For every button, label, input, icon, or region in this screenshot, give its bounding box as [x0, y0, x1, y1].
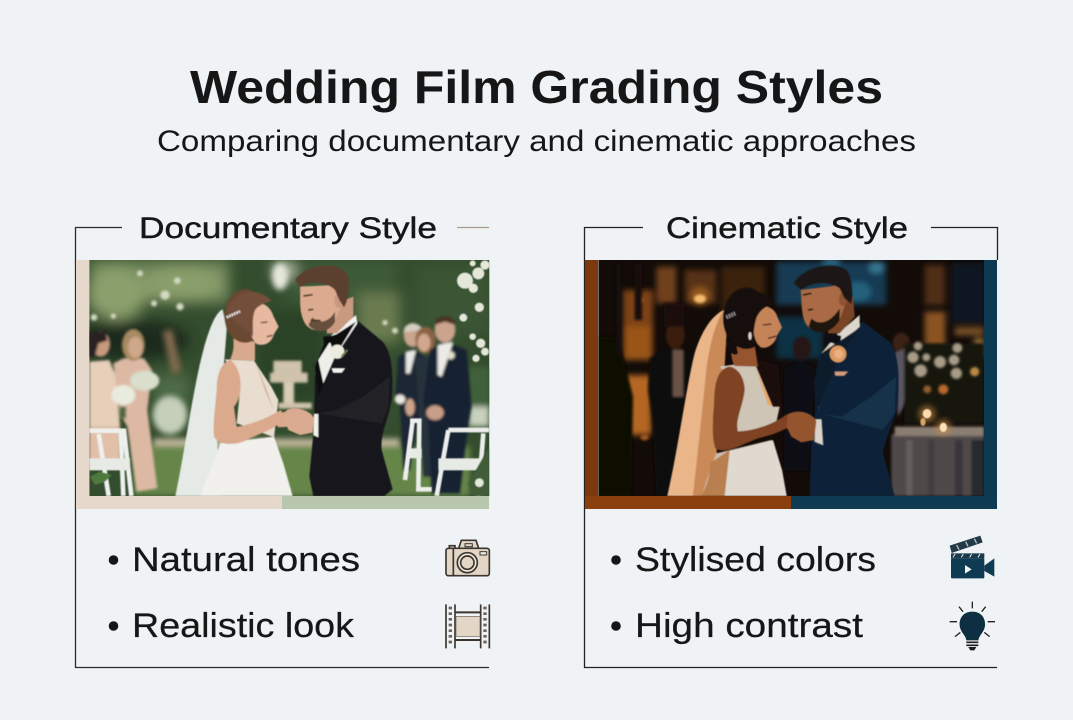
panel: documentary style [76, 212, 490, 668]
icon: camera [446, 540, 489, 576]
infographic canvas [74, 70, 998, 668]
icon: clapperboard video camera [950, 536, 994, 578]
panel frame [76, 228, 489, 668]
bullet list: cinematic: Stylised colors [635, 541, 876, 579]
bullet list: documentary [109, 541, 360, 645]
white climbing flowers [457, 260, 490, 496]
wall lamp [638, 286, 710, 440]
subtitle: Comparing documentary and cinematic approaches [157, 125, 916, 158]
photo: stylised wedding couple [598, 258, 984, 496]
background guests [395, 316, 472, 493]
colour strips: teal and orange palette [585, 260, 997, 509]
heading: cinematic style: Cinematic Style [666, 212, 908, 245]
title: Wedding Film Grading Styles [190, 61, 883, 113]
colour strips: natural palette [76, 260, 489, 509]
left chairs [89, 431, 131, 496]
background figures [598, 286, 911, 496]
bullet list: cinematic: High contrast [635, 607, 864, 645]
bullet list: cinematic [611, 541, 876, 645]
panel: cinematic style [584, 212, 998, 668]
groom [285, 266, 393, 496]
groom [786, 266, 899, 496]
bride [175, 289, 297, 496]
right chairs [405, 421, 489, 496]
icon: film strip [446, 604, 489, 648]
background pedestal [270, 361, 312, 409]
heading: documentary style: Documentary Style [139, 212, 437, 245]
panel frame [584, 228, 998, 668]
bullet list: documentary: Realistic look [132, 607, 355, 645]
bridesmaids [89, 329, 159, 492]
bullet list: documentary: Natural tones [132, 541, 360, 579]
floral table [891, 342, 984, 496]
bride [667, 288, 795, 496]
photo: natural-toned wedding couple [77, 260, 490, 496]
icon: light bulb [950, 602, 995, 650]
